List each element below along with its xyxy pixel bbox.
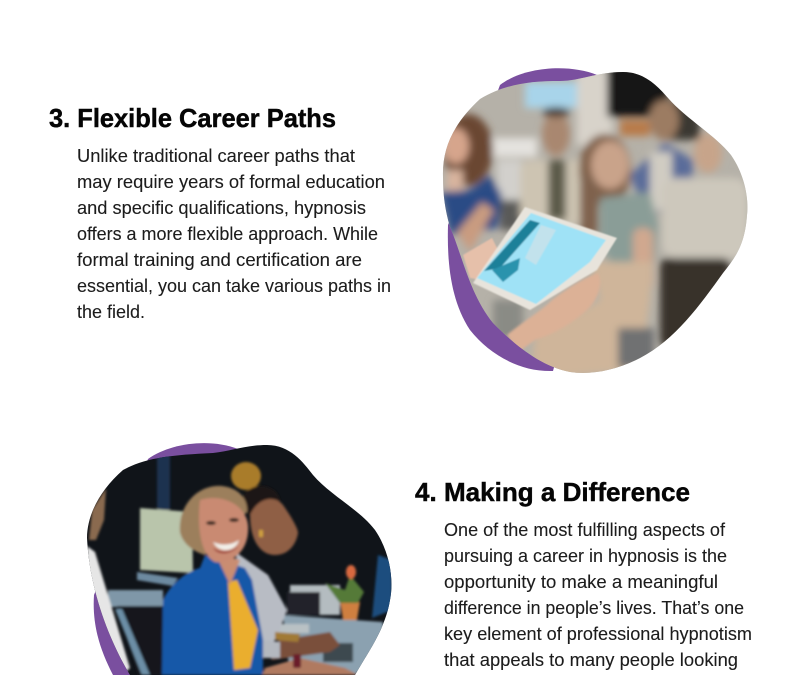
- first woman: [162, 555, 263, 675]
- text block: flexible career paths: may require years of formal education: [77, 172, 385, 192]
- text block: flexible career paths: formal training and certification are: [77, 250, 362, 270]
- heading: 4. Making a Difference: 4. Making a Difference: [415, 477, 690, 507]
- monitor: [140, 508, 193, 573]
- man right cream: [694, 133, 722, 173]
- text block: flexible career paths: essential, you can take various paths in: [77, 276, 391, 296]
- man right blue: [627, 140, 697, 198]
- text block: making a difference: One of the most fulfilling aspects of: [444, 520, 726, 540]
- man centre: [520, 160, 588, 225]
- left person: [89, 488, 106, 540]
- hands and tablet: [463, 207, 617, 310]
- text block: making a difference: pursuing a career in hypnosis is the: [444, 546, 727, 566]
- second woman: [234, 552, 289, 643]
- text block: flexible career paths: [77, 146, 391, 322]
- photo blob: presenter with tablet: [442, 68, 748, 373]
- photo: office scene: [80, 435, 400, 675]
- desk left: [108, 590, 163, 607]
- text block: making a difference: that appeals to many people looking: [444, 650, 738, 670]
- text block: making a difference: key element of professional hypnotism: [444, 624, 752, 644]
- text block: flexible career paths: offers a more flexible approach. While: [77, 224, 378, 244]
- text block: making a difference: [444, 520, 752, 670]
- woman centre: [579, 134, 631, 206]
- desk right: [283, 615, 385, 675]
- chair: [117, 606, 163, 675]
- blue object right: [372, 555, 392, 618]
- text block: flexible career paths: the field.: [77, 302, 145, 322]
- photo blob: smiling colleagues at desk: [80, 435, 400, 675]
- text block: making a difference: difference in people’s lives. That’s one: [444, 598, 744, 618]
- plant: [340, 602, 360, 620]
- purple blob accent: [94, 443, 240, 675]
- purple blob accent: [448, 68, 600, 371]
- hand on keyboard: [262, 658, 358, 675]
- heading: 3. Flexible Career Paths: 3. Flexible Career Paths: [49, 103, 336, 133]
- text block: making a difference: opportunity to make a meaningful: [444, 572, 718, 592]
- text block: flexible career paths: Unlike traditional career paths that: [77, 146, 355, 166]
- text block: flexible career paths: and specific qualifications, hypnosis: [77, 198, 366, 218]
- photo: audience and tablet: [442, 72, 748, 373]
- woman left: [443, 114, 493, 186]
